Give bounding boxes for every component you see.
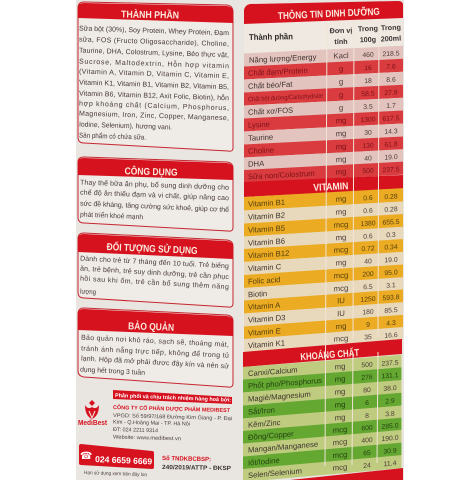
vitamin band: VITAMIN [313, 181, 349, 194]
group: minerals: 131.1 [382, 372, 399, 380]
text: ingredients: Sucrose, Maltodextrin, Hỗn hợp vitamin [79, 57, 229, 70]
group: vitamins: Vitamin B6 [248, 236, 285, 248]
hotline box [79, 444, 154, 469]
group: vitamins: mcg [334, 271, 348, 281]
group: vitamins [244, 188, 403, 352]
group: vitamins: Vitamin C [248, 262, 282, 273]
group: vitamins: 0.28 [384, 193, 398, 201]
table title band: THÔNG TIN DINH DƯỠNG [278, 5, 380, 22]
group: nutrients: Chất đạm/Protein [248, 66, 308, 78]
group: minerals: 24 [363, 462, 371, 470]
group: minerals: 400 [361, 437, 373, 445]
group: vitamins: 0.28 [384, 206, 398, 214]
text: ingredients [79, 26, 229, 142]
group: vitamins: mg [336, 194, 346, 204]
group: minerals: Mangan/Manganese [248, 440, 318, 455]
group: vitamins: mcg [334, 220, 348, 230]
text: storage: dụng hết trong 3 tuần [80, 365, 145, 377]
group: nutrients: 61.8 [384, 141, 398, 149]
group: vitamins: Vitamin K1 [248, 338, 285, 350]
group: vitamins: 200 [362, 271, 374, 279]
heading: thành phần: THÀNH PHẦN [121, 7, 179, 22]
logo: MediBest [78, 400, 108, 427]
group: nutrients: 19.0 [384, 154, 398, 162]
group: vitamins: Folic acid [248, 275, 280, 286]
company details [113, 403, 232, 442]
khoáng chất band: KHOÁNG CHẤT [300, 346, 360, 363]
company details: VPGD: Số 59/97/168 Đường Kim Giang - P. Đại [113, 413, 232, 422]
group: vitamins: Vitamin B2 [248, 211, 285, 222]
text: uses [80, 178, 229, 221]
text: ingredients: sữa, FOS (Fructo Oligosaccharide), Choline, [79, 37, 229, 48]
group: vitamins: 85.5 [384, 307, 398, 315]
group: nutrients: DHA [248, 159, 265, 169]
group: nutrients: mg [336, 142, 346, 151]
group: nutrients: 460 [362, 52, 374, 59]
group: vitamins: mg [336, 258, 346, 268]
text: uses: chế độ ăn thiếu đạm và vi chất, giúp nâng cao [80, 188, 229, 202]
text: ingredients: Sản phẩm có chứa sữa. [79, 132, 146, 142]
group: nutrients: Chất bột đường/Carbohydrate [248, 91, 323, 103]
group: minerals: Iốt/Iodine [248, 456, 280, 468]
group: vitamins: mg [336, 207, 346, 217]
group: minerals: Selen/Selenium [248, 466, 302, 480]
panel: công dụng [78, 157, 233, 231]
group: vitamins: 40 [364, 258, 372, 266]
group: minerals [243, 355, 402, 480]
group: nutrients: mg [336, 116, 346, 125]
table base [243, 1, 403, 478]
group: minerals: Phốt pho/Phosphorus [248, 376, 322, 391]
heading: bảo quản: BẢO QUẢN [128, 319, 174, 334]
vitamin band [244, 175, 403, 197]
group: minerals: mcg [333, 462, 347, 473]
group: nutrients: 3.5 [363, 104, 373, 111]
group: vitamins: 1250 [360, 296, 376, 304]
company details: Kim - Q.Hoàng Mai - TP. Hà Nội [113, 420, 190, 428]
group: minerals: mcg [333, 437, 347, 447]
group: vitamins: Vitamin B12 [248, 249, 289, 260]
group: nutrients: Chất béo/Fat [248, 80, 293, 91]
certificate number [162, 455, 231, 472]
group: vitamins: IU [337, 296, 345, 305]
group: minerals: 6 [365, 400, 369, 407]
column headers: 100g [360, 35, 376, 44]
group: vitamins: mcg [334, 245, 348, 255]
group: vitamins: 4.3 [386, 320, 396, 328]
group: minerals: 65 [363, 450, 371, 457]
column separators [325, 19, 379, 466]
group: vitamins: 1380 [360, 220, 376, 228]
group: minerals: mcg [333, 450, 347, 460]
text: ingredients: Vitamin B6, Vitamin B12, Axit Folic, Biotin), hỗn [79, 89, 229, 102]
group: nutrients: 500 [362, 168, 374, 175]
group: nutrients: 58.5 [361, 91, 375, 98]
group: minerals: 11.4 [384, 460, 397, 468]
group: vitamins: Vitamin B5 [248, 224, 285, 235]
khoáng chất band [243, 339, 402, 367]
group: vitamins: 16.6 [384, 332, 398, 340]
group: vitamins: Vitamin A [248, 300, 281, 312]
group: nutrients: Lysine [248, 120, 270, 130]
group: minerals: mg [335, 387, 345, 397]
text: uses: phát triển khoẻ mạnh [80, 211, 143, 221]
group: vitamins: 593.8 [383, 294, 400, 302]
group: minerals: mcg [333, 425, 347, 435]
can label background [76, 0, 404, 480]
panel: bảo quản [78, 308, 233, 387]
group: nutrients: 30 [364, 130, 372, 137]
group: minerals: 38.0 [383, 385, 397, 393]
group: minerals: 237.5 [382, 360, 399, 368]
group: minerals: mg [335, 362, 345, 371]
text: storage: Bảo quản nơi khô ráo, sạch sẽ, thoáng mát, [81, 335, 229, 349]
text: ingredients: Sữa bột (30%), Soy Protein, Whey Protein, Đạm [79, 26, 229, 37]
group: minerals: 8 [365, 413, 369, 420]
group: minerals: Sắt/Iron [248, 405, 275, 417]
text: target users: Dành cho trẻ từ 7 tháng đến 10 tuổi. Trẻ biếng [80, 254, 229, 270]
heading: công dụng: CÔNG DỤNG [124, 164, 178, 179]
group: vitamins: 0.6 [363, 195, 373, 202]
group: vitamins: 6.5 [363, 284, 373, 291]
column headers: Trong [381, 23, 401, 32]
group: minerals: mg [335, 413, 345, 422]
group: vitamins: Vitamin D3 [248, 313, 285, 325]
group: vitamins: 655.5 [382, 219, 400, 227]
group: nutrients: 130 [362, 142, 374, 150]
hotline box: 024 6659 6669 [95, 454, 153, 466]
panel: nutrition table [243, 1, 403, 480]
group: nutrients: Sữa non/Colostrum [248, 169, 315, 181]
text: ingredients: Magnesium, Iron, Zinc, Copper, Manganese, [79, 111, 229, 122]
text: target users [80, 254, 230, 296]
group: vitamins: 95.0 [384, 269, 398, 277]
column headers: Trong [358, 24, 378, 33]
group: minerals: Kẽm/Zinc [248, 418, 281, 430]
company details: ĐT: 024 2211 9314 [113, 427, 158, 434]
text: target users: hồi sau khi ốm, trẻ cần bổ sung thêm năng [80, 274, 229, 291]
text: uses: Thay thế bữa ăn phụ, bổ sung dinh dưỡng cho [80, 178, 229, 192]
text: ingredients: hợp khoáng chất (Calcium, Phosphorus, [79, 99, 229, 112]
group: nutrients: mg [336, 129, 346, 138]
company details: CÔNG TY CỔ PHẦN DƯỢC PHẨM MEDIBEST [113, 403, 231, 414]
group: vitamins: mcg [334, 334, 348, 344]
group: nutrients: 14.3 [384, 128, 398, 136]
column headers: Đơn vị [330, 26, 352, 35]
text: ingredients: Iodine, Selenium), hương vani. [79, 122, 172, 131]
distributor banner: Phân phối và chịu trách nhiệm hàng hoá bởi: [115, 392, 231, 404]
group: minerals: mg [335, 374, 345, 384]
group: minerals: Canxi/Calcium [248, 365, 298, 378]
group: nutrients: Taurine [248, 133, 273, 143]
table title band [244, 1, 403, 24]
group: nutrients: 1300 [360, 116, 376, 124]
group: nutrients: 27.8 [384, 89, 398, 97]
group: vitamins: 3.1 [386, 282, 396, 290]
group: nutrients: Năng lượng/Energy [249, 52, 317, 65]
group: minerals: 80 [363, 387, 371, 395]
group: vitamins: 0.34 [384, 244, 398, 252]
group: vitamins: Vitamin B1 [248, 198, 285, 209]
icon: telephone: ☎ [80, 451, 92, 462]
group: vitamins: mg [336, 321, 346, 331]
text: uses: sức đề kháng, tăng cường sức khoẻ, giúp cơ thể [80, 199, 229, 214]
group: minerals: 2.9 [385, 398, 395, 406]
column headers: tính [334, 37, 348, 46]
group: vitamins: 9 [366, 322, 370, 329]
group: vitamins: 0.3 [386, 232, 396, 239]
group: nutrients: 40 [364, 155, 372, 163]
group: minerals: 30.9 [383, 448, 397, 456]
group: minerals: mg [335, 400, 345, 410]
group: vitamins: 180 [362, 309, 374, 317]
text: storage [80, 335, 229, 377]
column headers [249, 23, 401, 46]
group: vitamins: mg [336, 233, 346, 242]
group: vitamins: 35 [364, 334, 372, 341]
group: minerals: Đồng/Copper [248, 429, 294, 442]
group: nutrients: 18 [364, 78, 372, 85]
group: nutrients: Choline [248, 145, 274, 156]
group: nutrients [244, 46, 403, 183]
company details: Website: www.medibest.vn [113, 435, 181, 442]
group: vitamins: 0.6 [363, 233, 373, 241]
column headers: Thành phần [249, 31, 293, 42]
text: ingredients: Taurine, DHA, Colostrum, Lysine, Béo thực vật, [79, 48, 229, 59]
group: nutrients: 7.6 [386, 64, 396, 71]
group: minerals: 3.8 [385, 411, 395, 418]
text: ingredients: (Vitamin A, Vitamin D, Vitamin C, Vitamin E, [79, 69, 229, 80]
column headers: 200ml [381, 34, 401, 43]
group: nutrients: g [339, 103, 343, 112]
panel: thành phần [78, 2, 233, 151]
certificate number: 240/2019/ATTP - ĐKSP [162, 464, 231, 472]
text: target users: lượng [80, 289, 96, 296]
group: nutrients: g [339, 90, 343, 99]
group: minerals: 190.0 [382, 435, 399, 443]
certificate number: Số TNDKBCBSP: [162, 455, 211, 463]
expiry note: Hạn sử dụng xem trên đáy lon [84, 469, 147, 478]
group: minerals: 276 [361, 374, 373, 382]
group: nutrients: 1.7 [386, 103, 396, 110]
group: nutrients: Kacl [333, 51, 349, 61]
group: nutrients: g [339, 77, 343, 86]
group: nutrients: Chất xơ/FOS [248, 106, 293, 117]
group: nutrients: mg [336, 155, 346, 164]
text: storage: lạnh. Hộp đã mở phải được đậy kín và nên sử [81, 355, 229, 371]
text: target users: ăn, trẻ bệnh, trẻ suy dinh dưỡng, trẻ cần phục [80, 264, 230, 281]
group: vitamins: Vitamin E [248, 326, 281, 338]
group: minerals: 285.0 [382, 422, 399, 431]
group: nutrients: 218.5 [382, 50, 400, 58]
group: minerals: Magiê/Magnesium [248, 390, 311, 404]
heading: đối tượng sử dụng: ĐỐI TƯỢNG SỬ DỤNG [106, 239, 198, 257]
group: minerals: 600 [361, 425, 373, 433]
text: storage: tránh ánh nắng trực tiếp, không để trong tủ [81, 344, 229, 360]
group: vitamins: mcg [334, 283, 348, 293]
panel: đối tượng sử dụng [78, 233, 233, 307]
group: nutrients: g [339, 64, 343, 73]
text: ingredients: Vitamin K1, Vitamin B1, Vitamin B2, Vitamin B5, [79, 80, 229, 91]
group: vitamins: 0.72 [361, 245, 375, 253]
group: nutrients: mg [336, 167, 346, 177]
group: vitamins: 19.0 [384, 257, 398, 264]
group: nutrients: 237.5 [382, 166, 400, 174]
group: nutrients: 8.6 [386, 77, 396, 84]
group: nutrients: 617.5 [382, 115, 400, 123]
logo: MediBest: MediBest [78, 418, 108, 427]
group: vitamins: Biotin [248, 289, 267, 299]
group: vitamins: 0.6 [363, 208, 373, 215]
group: vitamins: IU [337, 309, 345, 318]
bottom red edge [290, 468, 403, 480]
group: nutrients: 16 [364, 65, 372, 72]
group: minerals: 500 [361, 362, 373, 369]
